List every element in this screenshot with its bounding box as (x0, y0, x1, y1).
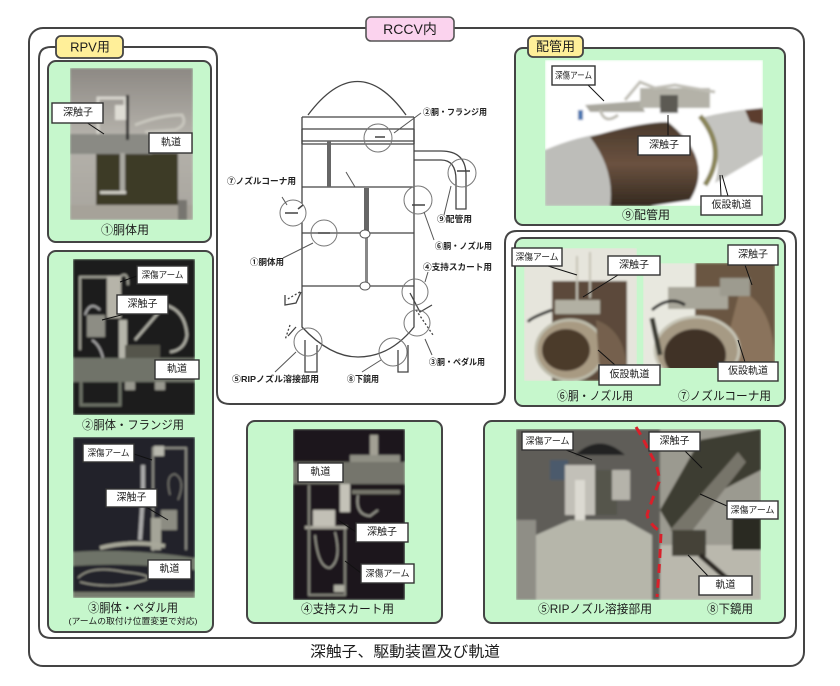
tab: RCCV内 (366, 17, 454, 41)
diagram: reactor vessel (227, 82, 492, 384)
label: 深触子: 深触子 (116, 490, 146, 504)
label: 深傷アーム (700, 494, 778, 519)
photo: pedestal scanner (73, 437, 195, 598)
label: 深傷アーム: 深傷アーム (366, 568, 410, 578)
label: 仮設軌道 (⑦) (718, 340, 778, 381)
panel: ⑥⑦ (512, 238, 785, 406)
label: 軌道: 軌道 (161, 136, 181, 148)
inner frame: RPV (39, 47, 796, 638)
label: 深触子 (338, 520, 408, 542)
label: 軌道 (298, 463, 343, 482)
panel: ⑨配管用 (515, 48, 785, 225)
label: 深傷アーム: 深傷アーム (526, 435, 570, 446)
caption: ②胴体・フランジ用: ②胴体・フランジ用 (82, 418, 184, 432)
photo: trunk scanner (70, 68, 193, 220)
caption: ⑦ノズルコーナ用: ⑦ノズルコーナ用 (678, 388, 771, 403)
label: 深傷アーム (552, 66, 604, 101)
footer caption: 深触子、駆動装置及び軌道 (310, 644, 500, 660)
label: 深触子: 深触子 (649, 138, 679, 151)
labels: ⑤RIPノズル溶接部用 (232, 374, 319, 384)
tab: 配管用 (528, 36, 583, 57)
tab: 配管用: 配管用 (536, 39, 575, 54)
panel: ④支持スカート用 (247, 421, 442, 623)
label: 軌道: 軌道 (310, 465, 330, 478)
label: 深傷アーム: 深傷アーム (516, 251, 558, 262)
photo: piping scanner (545, 60, 763, 206)
label: 深傷アーム: 深傷アーム (88, 447, 130, 458)
label: 深傷アーム: 深傷アーム (730, 504, 774, 515)
photo: flange scanner (73, 259, 195, 415)
labels: ④支持スカート用 (423, 262, 492, 272)
label: 深触子 (649, 432, 702, 468)
label: 仮設軌道 (⑥): 仮設軌道 (610, 368, 650, 380)
photo: nozzle corner scanner (643, 263, 775, 368)
label: 深傷アーム (345, 561, 414, 583)
panel: ②③ (48, 251, 213, 632)
label: 軌道 (149, 133, 192, 153)
caption: ③胴体・ペダル用: ③胴体・ペダル用 (88, 600, 178, 615)
tab: RPV用 (56, 36, 123, 58)
label: 深触子: 深触子 (619, 258, 649, 271)
label: 深触子 (⑦): 深触子 (738, 248, 768, 260)
label: 深傷アーム: 深傷アーム (555, 70, 592, 80)
panel: ⑤⑧ (484, 421, 785, 623)
caption: ⑨配管用: ⑨配管用 (622, 207, 670, 222)
labels: ③胴・ペダル用 (429, 357, 485, 367)
panel: ①胴体用 (48, 61, 211, 242)
red dashed divider (636, 427, 661, 597)
photo: RIP nozzle and lower head scanners (516, 429, 761, 600)
label: 深触子 (638, 115, 690, 155)
labels: ②胴・フランジ用 (423, 107, 487, 117)
label: 仮設軌道 (⑥) (598, 350, 660, 385)
labels: ①胴体用 (250, 257, 284, 267)
label: 深傷アーム: 深傷アーム (142, 269, 184, 280)
label: 仮設軌道: 仮設軌道 (712, 198, 752, 211)
label: 深傷アーム (512, 248, 577, 275)
photo: skirt scanner (293, 429, 405, 600)
caption: ④支持スカート用: ④支持スカート用 (301, 601, 394, 616)
label: 軌道: 軌道 (167, 362, 187, 375)
label: 深傷アーム (522, 432, 592, 460)
labels: ⑧下鏡用 (347, 374, 379, 384)
label: 深触子 (⑦) (728, 245, 778, 285)
label: 深触子 (102, 295, 168, 320)
label: 深傷アーム (83, 444, 152, 462)
detail circles (280, 124, 476, 366)
label: 仮設軌道 (701, 175, 762, 215)
labels: ⑦ノズルコーナ用 (227, 176, 296, 186)
label: 深傷アーム (120, 266, 188, 284)
callout arrows (275, 113, 451, 372)
labels (227, 107, 492, 384)
vessel outline (285, 82, 466, 372)
label: 深触子: 深触子 (660, 434, 690, 447)
labels: ⑨配管用 (437, 214, 472, 224)
label: 軌道: 軌道 (716, 578, 736, 591)
label: 深触子: 深触子 (128, 297, 158, 310)
label: 深触子 (52, 103, 104, 134)
label: 深触子 (583, 256, 660, 297)
caption: ⑤RIPノズル溶接部用: ⑤RIPノズル溶接部用 (538, 601, 652, 616)
labels: ⑥胴・ノズル用 (435, 241, 492, 251)
label: 軌道 (688, 555, 752, 595)
photo: shell nozzle scanner (524, 248, 637, 381)
label: 深触子: 深触子 (367, 525, 397, 538)
label: 深触子 (106, 489, 168, 520)
caption: ⑧下鏡用: ⑧下鏡用 (707, 602, 753, 616)
label: 深触子: 深触子 (63, 106, 93, 118)
caption: ⑥胴・ノズル用: ⑥胴・ノズル用 (557, 388, 633, 403)
label: 軌道: 軌道 (160, 562, 180, 575)
label: 軌道 (148, 560, 191, 579)
caption: ①胴体用: ①胴体用 (101, 223, 149, 237)
label: 仮設軌道 (⑦): 仮設軌道 (728, 364, 768, 377)
note: arm mounting position: (アームの取付け位置変更で対応) (68, 616, 198, 626)
tab: RPV用: RPV用 (70, 40, 110, 54)
label: 軌道 (155, 360, 199, 379)
tab: RCCV内: RCCV内 (383, 21, 437, 37)
